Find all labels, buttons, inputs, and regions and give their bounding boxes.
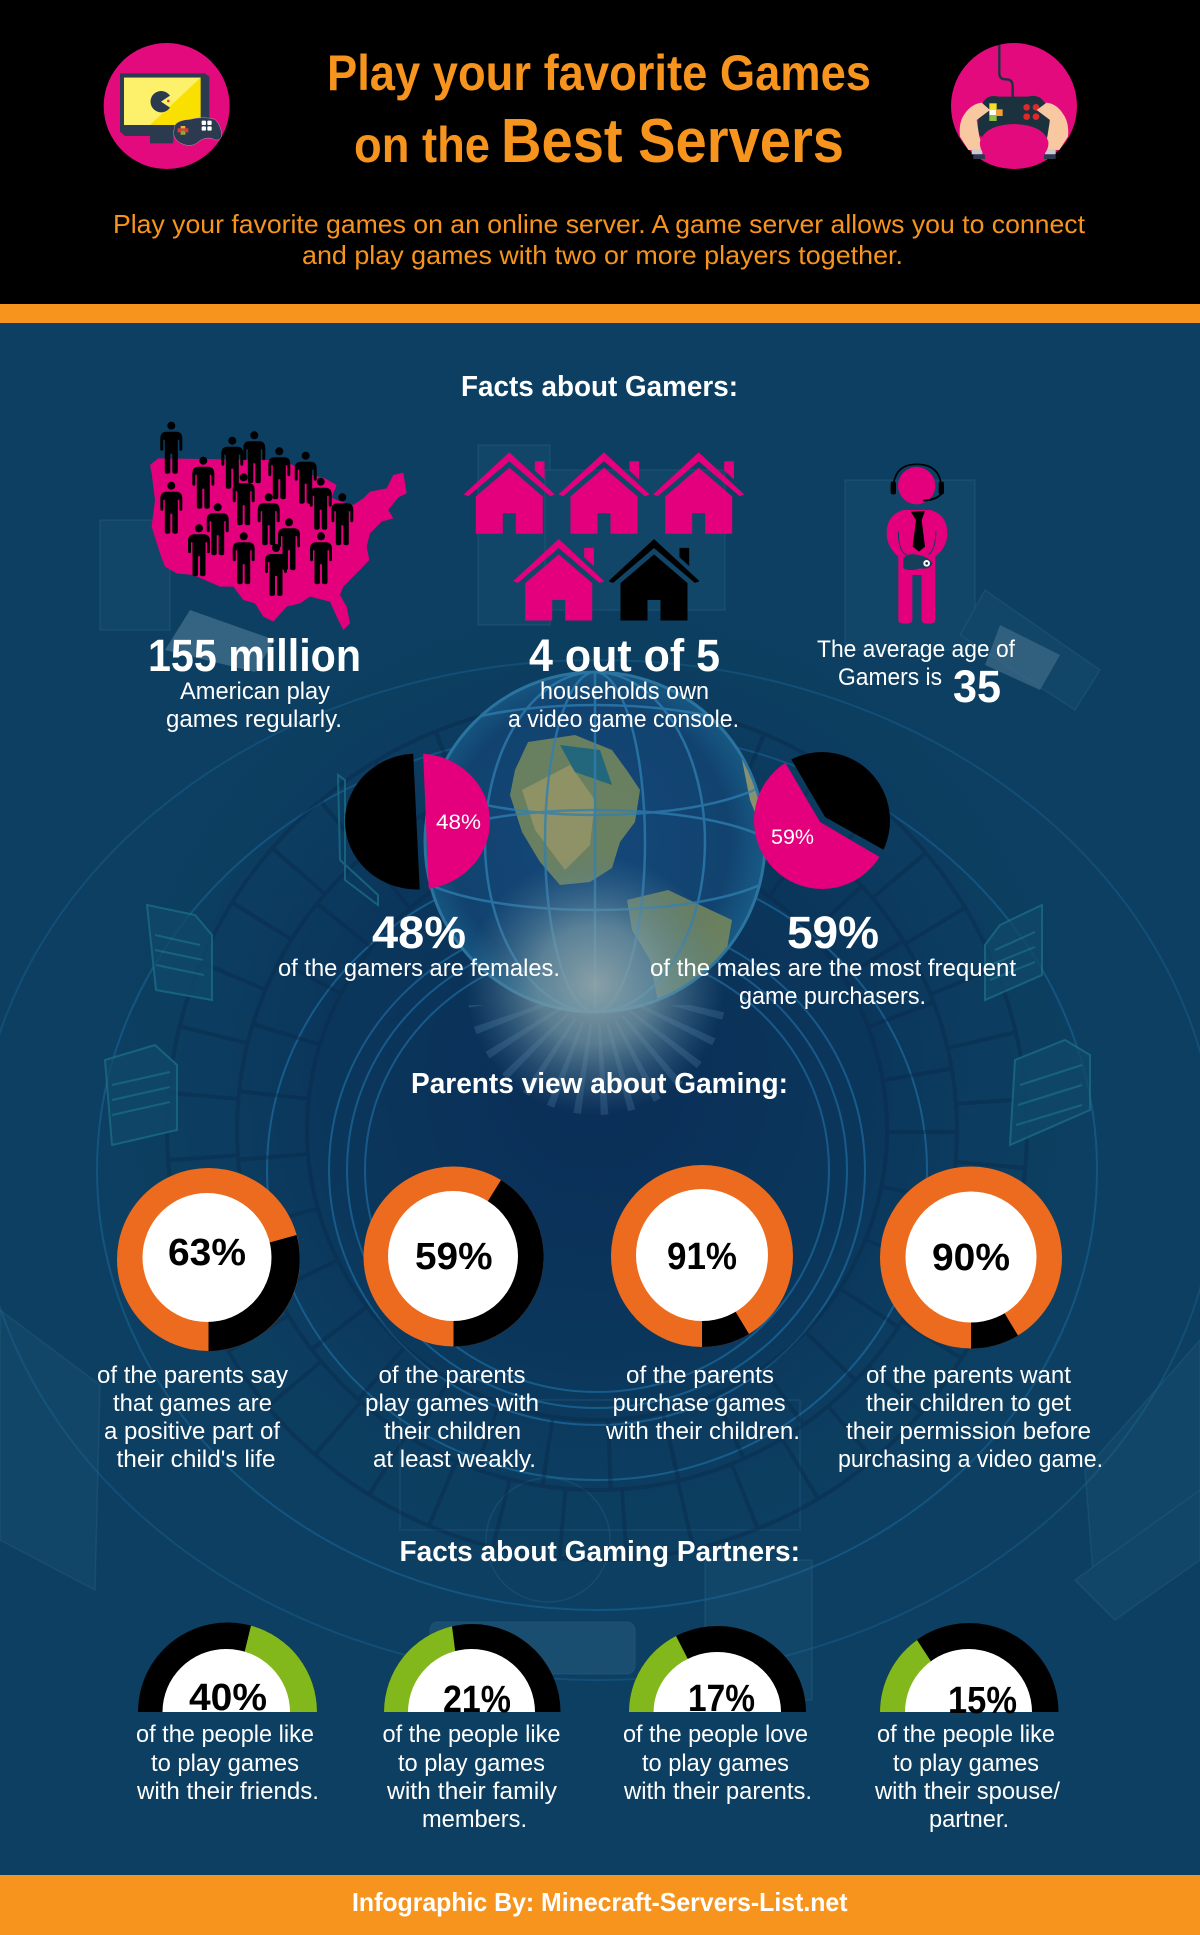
- intro text: Play your favorite games on an online server. A game server allows you to connect: [113, 209, 1086, 239]
- donut chart: 59%: 59%: [415, 1236, 492, 1278]
- caption: [874, 1721, 1060, 1833]
- caption: [136, 1721, 319, 1805]
- gauge chart: 21%: 21%: [443, 1679, 511, 1721]
- background: central glow and rays: [465, 855, 725, 1115]
- background: globe: [405, 672, 785, 1013]
- icon: gamer with headset: [887, 464, 947, 624]
- caption: American play: [180, 678, 330, 705]
- gauge chart: 15%: [880, 1623, 1058, 1722]
- caption: with their spouse/: [874, 1778, 1060, 1805]
- gauge chart: 40%: [138, 1622, 317, 1719]
- partners stat: 40%: [136, 1622, 319, 1805]
- caption: of the people like: [136, 1721, 314, 1748]
- big number: 48%: [372, 907, 466, 958]
- caption: The average age of: [817, 636, 1015, 663]
- caption: of the parents say: [97, 1362, 288, 1389]
- parents stat: 59%: [364, 1166, 544, 1473]
- intro text: [113, 209, 1086, 270]
- footer: [0, 1875, 1200, 1935]
- donut chart: 90%: [880, 1166, 1062, 1349]
- caption: Gamers is: [838, 664, 942, 691]
- title: on the: [354, 117, 490, 173]
- caption: of the parents: [378, 1362, 526, 1389]
- caption: of the males are the most frequent: [650, 955, 1016, 982]
- caption: [605, 1362, 800, 1445]
- background: faint monitors and machines: [0, 445, 1200, 1700]
- caption: their child's life: [116, 1446, 276, 1473]
- partners stat: 15%: [874, 1623, 1060, 1833]
- caption: [166, 678, 342, 733]
- heading: gaming partners: Facts about Gaming Partners:: [400, 1536, 800, 1568]
- parents stat: 63%: [97, 1168, 300, 1473]
- caption: of the parents: [626, 1362, 774, 1389]
- orange divider band: [0, 304, 1200, 323]
- pie chart: 59%: 59%: [771, 826, 814, 849]
- gauge chart: 40%: 40%: [189, 1677, 267, 1719]
- caption: to play games: [398, 1750, 545, 1777]
- parents stat: 91%: [605, 1165, 800, 1445]
- caption: games regularly.: [166, 706, 342, 733]
- caption: of the people like: [877, 1721, 1055, 1748]
- title: [327, 45, 871, 176]
- partners stat: 17%: [623, 1626, 812, 1805]
- caption: with their children.: [605, 1418, 800, 1445]
- caption: households own: [540, 678, 709, 705]
- caption: members.: [422, 1806, 527, 1833]
- intro text: and play games with two or more players together.: [302, 240, 903, 270]
- heading: facts about gamers: Facts about Gamers:: [461, 371, 738, 403]
- caption: purchase games: [613, 1390, 786, 1417]
- icon: hands holding a game controller: [951, 43, 1077, 169]
- icon: USA map with people: [150, 422, 407, 630]
- caption: with their friends.: [136, 1778, 319, 1805]
- donut chart: 90%: 90%: [932, 1237, 1010, 1279]
- caption: a positive part of: [104, 1418, 280, 1445]
- caption: of the gamers are females.: [278, 955, 560, 982]
- caption: of the people love: [623, 1721, 808, 1748]
- big number: 59%: [787, 907, 879, 958]
- background: concentric rings: [0, 660, 1200, 1680]
- caption: [650, 955, 1016, 1010]
- stat: 4 out of 5: [465, 453, 743, 733]
- caption: [97, 1362, 288, 1473]
- caption: that games are: [113, 1390, 272, 1417]
- background: document icons: [105, 775, 1090, 1145]
- caption: their permission before: [846, 1418, 1091, 1445]
- heading: parents view: Parents view about Gaming:: [411, 1068, 788, 1100]
- stat: average age: [817, 464, 1015, 712]
- footer: Infographic By: Minecraft-Servers-List.net: [352, 1887, 848, 1917]
- caption: [382, 1721, 560, 1833]
- big number: 4 out of 5: [529, 630, 720, 681]
- icon: five houses: [465, 453, 743, 620]
- caption: [838, 1362, 1103, 1473]
- caption: with their family: [386, 1778, 557, 1805]
- caption: of the parents want: [866, 1362, 1071, 1389]
- caption: [365, 1362, 539, 1473]
- caption: partner.: [929, 1806, 1009, 1833]
- donut chart: 63%: [117, 1168, 300, 1351]
- caption: [817, 636, 1015, 712]
- gauge chart: 17%: 17%: [688, 1678, 755, 1720]
- pie chart: 48%: [345, 754, 490, 890]
- donut chart: 59%: [364, 1166, 544, 1347]
- caption: to play games: [642, 1750, 789, 1777]
- pie chart: 48%: 48%: [436, 811, 481, 834]
- gauge chart: 17%: [629, 1626, 806, 1720]
- donut chart: 91%: 91%: [667, 1236, 737, 1278]
- caption: a video game console.: [508, 706, 739, 733]
- stat: 155 million: [148, 422, 407, 733]
- caption: game purchasers.: [739, 983, 926, 1010]
- stat: 48% female gamers: [278, 750, 560, 982]
- header panel: [0, 0, 1200, 304]
- caption: to play games: [893, 1750, 1039, 1777]
- caption: [623, 1721, 812, 1805]
- caption: their children: [384, 1418, 521, 1445]
- caption: [508, 678, 739, 733]
- caption: of the people like: [382, 1721, 560, 1748]
- gauge chart: 21%: [384, 1624, 560, 1721]
- caption: purchasing a video game.: [838, 1446, 1103, 1473]
- pie chart: 59%: [754, 752, 890, 889]
- caption: to play games: [151, 1750, 299, 1777]
- donut chart: 91%: [611, 1165, 793, 1347]
- gauge chart: 15%: 15%: [948, 1680, 1017, 1722]
- caption: their children to get: [866, 1390, 1071, 1417]
- parents stat: 90%: [838, 1166, 1103, 1473]
- title: Best Servers: [501, 107, 844, 176]
- background: dark web cells: [167, 700, 1027, 1560]
- caption: 35: [953, 661, 1001, 712]
- stat: 59% male purchasers: [650, 740, 1016, 1010]
- big number: 155 million: [148, 630, 361, 681]
- caption: at least weakly.: [373, 1446, 536, 1473]
- donut chart: 63%: 63%: [168, 1232, 246, 1274]
- icon: TV with pacman and game controller: [104, 43, 230, 169]
- partners stat: 21%: [382, 1624, 560, 1833]
- caption: play games with: [365, 1390, 539, 1417]
- background: faint keyboards: [165, 610, 1060, 690]
- title: Play your favorite Games: [327, 45, 871, 101]
- caption: with their parents.: [623, 1778, 812, 1805]
